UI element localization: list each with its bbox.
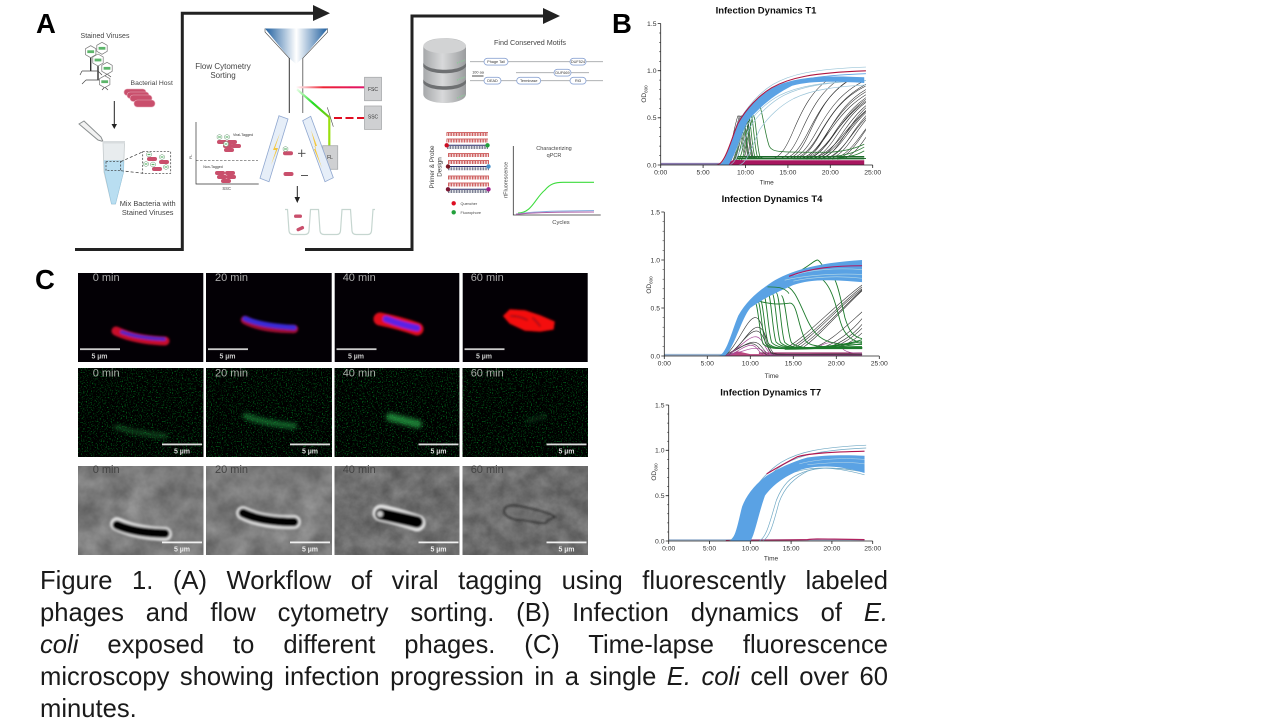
label: panel C: C: [35, 264, 55, 295]
row: green fluorescence: 40 min: [343, 368, 376, 380]
chart: FL versus SSC gating plot: Non-Tagged: [203, 165, 223, 169]
label: panel A: A: [36, 8, 56, 39]
tick labels: T4: 15:00: [785, 360, 802, 368]
tick labels: T7: 600: [654, 463, 658, 471]
arrow: workflow step one to two: [75, 5, 330, 250]
text: primer and probe design: Primer & Probe: [429, 145, 436, 189]
row: red and blue fluorescence: 20 min: [215, 272, 248, 284]
text: bacterial host: Bacterial Host: [131, 80, 173, 87]
text: flow cytometry sorting: Flow Cytometry: [195, 62, 251, 71]
tick labels: T4: 1.0: [651, 257, 660, 264]
row: phase contrast: 0 min: [93, 464, 120, 476]
legend: quencher and fluorophore: Fluorophore: [460, 211, 481, 215]
heading: T4: Infection Dynamics T4: [722, 194, 823, 205]
chart: infection dynamics T7: [651, 388, 881, 562]
caption: phages and flow cytometry sorting. (B) Infection dynamics of E.: [40, 599, 888, 627]
chart: conserved gene motif tracks: 100 aa: [472, 70, 485, 74]
icon: inset of mixed contents: [143, 152, 171, 173]
row: red and blue fluorescence: 40 min: [343, 272, 376, 284]
tick labels: T1: [641, 21, 881, 186]
row: green fluorescence: 20 min: [215, 368, 248, 380]
tick labels: T4: 0:00: [658, 360, 671, 368]
panel: infection dynamics charts: [642, 7, 888, 560]
tick labels: T7: 1.0: [655, 448, 665, 455]
tick labels: T1: 20:00: [822, 170, 839, 176]
chart: conserved gene motif tracks: Rt3: [575, 79, 581, 83]
tick labels: T7: 0:00: [662, 546, 676, 552]
arrow: down to wells: [294, 186, 300, 203]
chart: conserved gene motif tracks: Phage Tail: [487, 60, 505, 64]
tick labels: T7: 5:00: [703, 546, 716, 552]
panel: time-lapse microscopy: [78, 272, 588, 555]
row: green fluorescence: 5 µm: [174, 448, 190, 456]
label: panel B: B: [612, 8, 632, 39]
tick labels: T1: Time: [760, 179, 774, 186]
row: green fluorescence: 5 µm: [430, 448, 447, 456]
icon: laser beams: [296, 86, 364, 146]
row: red and blue fluorescence: 5 µm: [476, 354, 492, 360]
caption: microscopy showing infection progression in a single E. coli cell over 60: [40, 663, 888, 691]
chart: conserved gene motif tracks: DUF524: [571, 60, 585, 64]
row: phase contrast: 60 min: [471, 464, 504, 476]
tick labels: T4: 600: [648, 276, 654, 284]
tick labels: T1: 0:00: [654, 170, 668, 176]
arrow: down to tube: [112, 101, 117, 129]
chart: characterizing qPCR: qPCR: [547, 153, 561, 159]
icon: right deflection plate: [303, 116, 333, 182]
row: red and blue fluorescence: 60 min: [471, 272, 504, 284]
tick labels: T7: OD: [651, 471, 658, 481]
row: phase contrast: 5 µm: [558, 546, 575, 554]
chart: infection dynamics T1: [642, 7, 881, 184]
tick labels: T1: 0.0: [647, 162, 657, 169]
tick labels: T4: 10:00: [742, 360, 759, 368]
axes: T1: [658, 24, 873, 168]
row: phase contrast: 5 µm: [174, 546, 190, 554]
tick labels: T4: 5:00: [701, 360, 714, 368]
row: green fluorescence: 0 min: [93, 368, 120, 380]
text: mix bacteria with stained viruses: Stained Viruses: [122, 208, 174, 217]
icon: SSC detector: [364, 106, 382, 129]
heading: T1: Infection Dynamics T1: [716, 6, 817, 16]
row: green fluorescence: 5 µm: [558, 448, 575, 456]
icon: funnel and nozzle: [265, 28, 328, 113]
icon: left deflection plate: [260, 116, 288, 182]
tick labels: T7: 15:00: [783, 546, 800, 552]
panel: flow cytometry sorting: [189, 28, 382, 234]
chart: FL versus SSC gating plot: Viral-Tagged: [233, 133, 253, 137]
text: primer and probe design: Design: [436, 157, 444, 177]
chart: conserved gene motif tracks: [470, 58, 603, 84]
tick labels: T7: [651, 402, 881, 562]
caption: coli exposed to different phages. (C) Time-lapse fluorescence: [40, 631, 888, 659]
row: red and blue fluorescence: 0 min: [93, 272, 120, 284]
panel: mixing bacteria with stained viruses: [79, 33, 176, 217]
chart: characterizing qPCR: Cycles: [552, 220, 570, 226]
caption: Figure 1. (A) Workflow of viral tagging using fluorescently labeled: [40, 567, 888, 595]
tick labels: T1: 5:00: [696, 170, 710, 176]
icon: FL detector: [323, 146, 338, 169]
curves: T1 growth curves: [661, 66, 866, 165]
chart: FL versus SSC gating plot: [189, 122, 259, 191]
tick labels: T7: 20:00: [823, 546, 841, 552]
icon: database cylinder: [423, 38, 466, 103]
heading: T7: Infection Dynamics T7: [720, 388, 821, 398]
icon: FSC detector: [364, 77, 382, 101]
row: phase contrast: 20 min: [215, 464, 248, 476]
chart: conserved gene motif tracks: DEAD: [487, 79, 498, 83]
tick labels: T4: 0.5: [651, 305, 660, 312]
row: phase contrast: 40 min: [343, 464, 376, 476]
tick labels: T1: 10:00: [737, 170, 754, 176]
tick labels: T7: 0.0: [655, 538, 665, 545]
icon: SSC detector: SSC: [368, 114, 379, 120]
tick labels: T4: [646, 209, 888, 380]
tick labels: T1: 0.5: [647, 115, 657, 122]
row: green fluorescence: 60 min: [471, 368, 504, 380]
icon: microcentrifuge tube: [79, 121, 143, 204]
icon: FL detector: FL: [327, 155, 333, 161]
row: red and blue fluorescence: [78, 272, 588, 362]
row: green fluorescence: 5 µm: [302, 448, 318, 456]
text: mix bacteria with stained viruses: Mix Bacteria with: [120, 199, 176, 208]
curves: T4 growth curves: [664, 260, 862, 356]
arrow: workflow step two to three: [305, 8, 560, 250]
tick labels: T4: 0.0: [651, 353, 660, 360]
tick labels: T4: 20:00: [828, 360, 845, 368]
chart: FL versus SSC gating plot: FL: [189, 155, 193, 159]
row: phase contrast: 5 µm: [302, 546, 318, 554]
row: red and blue fluorescence: 5 µm: [219, 354, 236, 360]
legend: quencher and fluorophore: [452, 201, 481, 215]
axes: T4: [661, 212, 879, 359]
icon: sorted cells with charges: [283, 146, 308, 176]
chart: primer and probe schematics: [444, 132, 491, 192]
tick labels: T4: 1.5: [651, 209, 660, 216]
curves: T7 growth curves: [669, 445, 878, 541]
tick labels: T7: 25:00: [864, 546, 881, 552]
tick labels: T7: Time: [764, 556, 778, 562]
text: stained viruses: Stained Viruses: [81, 33, 130, 40]
tick labels: T1: 25:00: [864, 170, 881, 176]
icon: FSC detector: FSC: [368, 87, 378, 93]
legend: quencher and fluorophore: Quencher: [460, 202, 478, 206]
panel: bioinformatics and qPCR design: [423, 38, 603, 226]
row: green fluorescence: [78, 368, 588, 457]
tick labels: T4: 25:00: [871, 360, 888, 368]
icon: collection wells: [285, 210, 375, 234]
tick labels: T7: 1.5: [655, 402, 665, 409]
tick labels: T1: 1.0: [647, 68, 657, 75]
icon: stained phage cluster: [80, 42, 112, 90]
tick labels: T4: Time: [765, 373, 779, 380]
caption: [40, 567, 888, 720]
tick labels: T1: 600: [644, 85, 648, 93]
text: find conserved motifs: Find Conserved Motifs: [494, 38, 566, 47]
chart: FL versus SSC gating plot: SSC: [222, 186, 231, 191]
icon: bacterial host stack: [124, 89, 155, 107]
row: red and blue fluorescence: 5 µm: [91, 354, 108, 360]
chart: conserved gene motif tracks: DUF669: [555, 71, 570, 75]
row: phase contrast: [78, 464, 588, 555]
tick labels: T1: 15:00: [779, 170, 797, 176]
tick labels: T4: OD: [646, 284, 653, 294]
tick labels: T7: 10:00: [742, 546, 759, 552]
row: phase contrast: 5 µm: [430, 546, 447, 554]
tick labels: T7: 0.5: [655, 493, 665, 500]
tick labels: T1: 1.5: [647, 21, 657, 28]
axes: T7: [666, 405, 873, 544]
chart: characterizing qPCR: rtFluorescence: [504, 162, 510, 198]
chart: infection dynamics T4: [646, 196, 888, 378]
chart: conserved gene motif tracks: Terminase: [520, 79, 537, 83]
text: flow cytometry sorting: Sorting: [210, 71, 236, 80]
chart: characterizing qPCR: [504, 146, 601, 226]
tick labels: T1: OD: [641, 93, 648, 103]
row: red and blue fluorescence: 5 µm: [348, 354, 364, 360]
chart: characterizing qPCR: Characterizing: [536, 146, 572, 152]
